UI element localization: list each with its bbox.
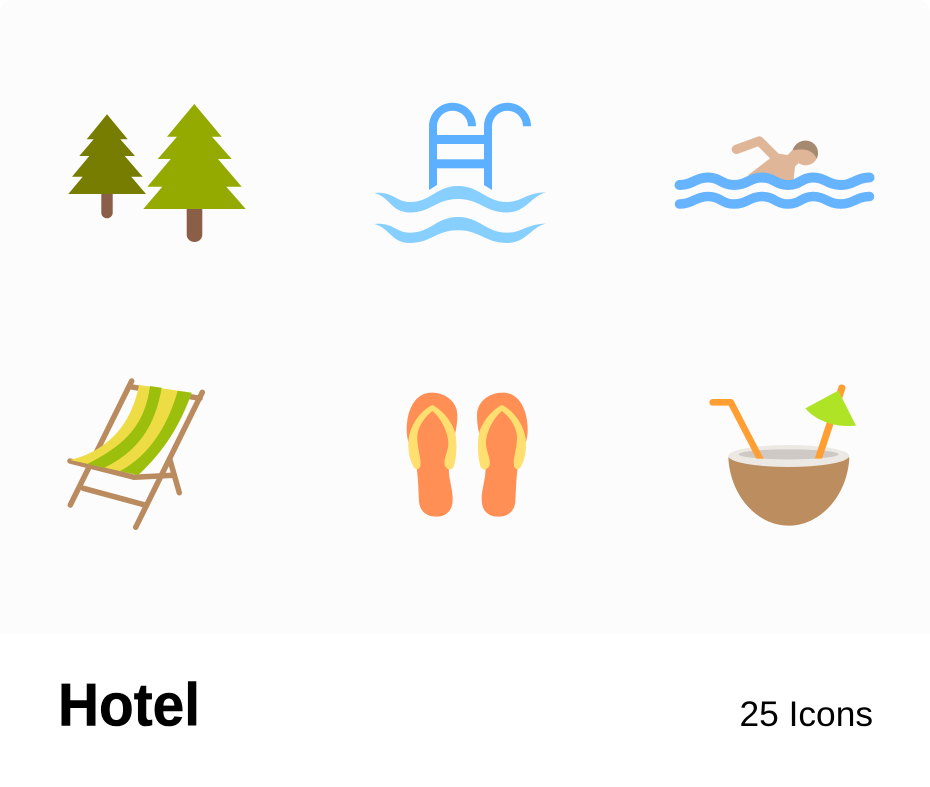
icon: deck chair [70,381,202,527]
icon: coconut drink [709,384,856,526]
right flip flop [477,393,528,517]
icon: pine trees [68,104,246,242]
icon: swimming pool ladder and water [374,103,546,243]
left flip flop [407,393,457,517]
title: Hotel [58,672,200,739]
icon count: 25 Icons [740,695,873,734]
icon: flip flops [407,393,528,517]
icon: swimmer in waves [680,141,870,204]
